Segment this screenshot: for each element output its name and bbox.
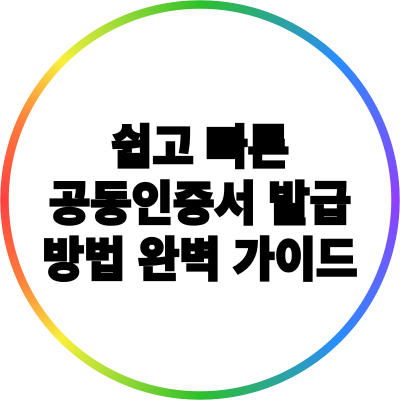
title: 방법 완벽 가이드	[43, 233, 357, 286]
title: 공동인증서 발급	[49, 177, 351, 230]
title: 쉽고 빠른	[111, 121, 289, 174]
title	[43, 121, 357, 286]
